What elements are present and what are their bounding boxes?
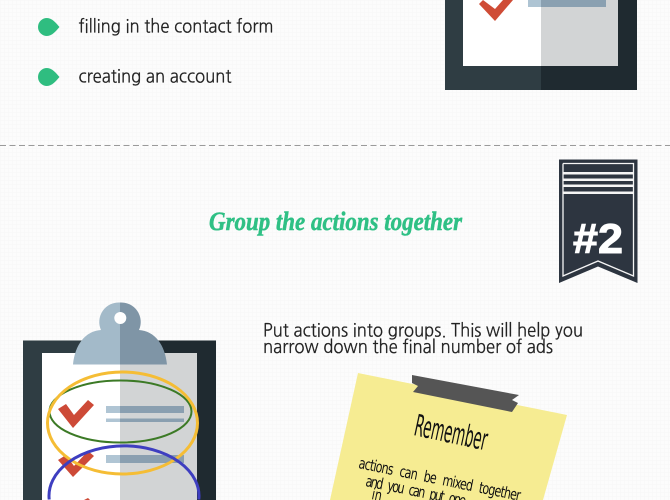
text: filling in the contact form: filling in the contact form xyxy=(78,18,274,36)
description text: Put actions into groups. This will help you xyxy=(263,322,583,340)
blue ellipse xyxy=(49,446,199,500)
tape xyxy=(412,375,519,412)
section divider xyxy=(0,144,670,146)
text: creating an account: creating an account xyxy=(78,68,232,86)
bullet: filling in the contact form xyxy=(38,18,60,36)
clipboard: group actions xyxy=(23,302,216,500)
icon: check 2 xyxy=(58,451,94,477)
bullet list xyxy=(38,18,274,86)
heading: Group the actions together xyxy=(209,207,463,236)
green ellipse xyxy=(50,380,192,442)
bullet: creating an account xyxy=(38,68,60,86)
icon: red check xyxy=(479,0,513,21)
yellow ellipse xyxy=(48,372,198,474)
text line 2 xyxy=(106,455,184,463)
badge number: #2 xyxy=(573,215,623,262)
icon: check 1 xyxy=(58,400,94,428)
description text: narrow down the final number of ads xyxy=(263,338,553,356)
text lines 1 xyxy=(106,406,184,422)
note title: Remember xyxy=(412,408,491,457)
icon: check 3 xyxy=(84,498,90,500)
icon: clipboard clip xyxy=(73,302,167,364)
clipboard: top section xyxy=(445,0,637,90)
ribbon badge #2 xyxy=(559,160,638,283)
sticky note xyxy=(330,373,567,500)
description text xyxy=(263,322,583,356)
